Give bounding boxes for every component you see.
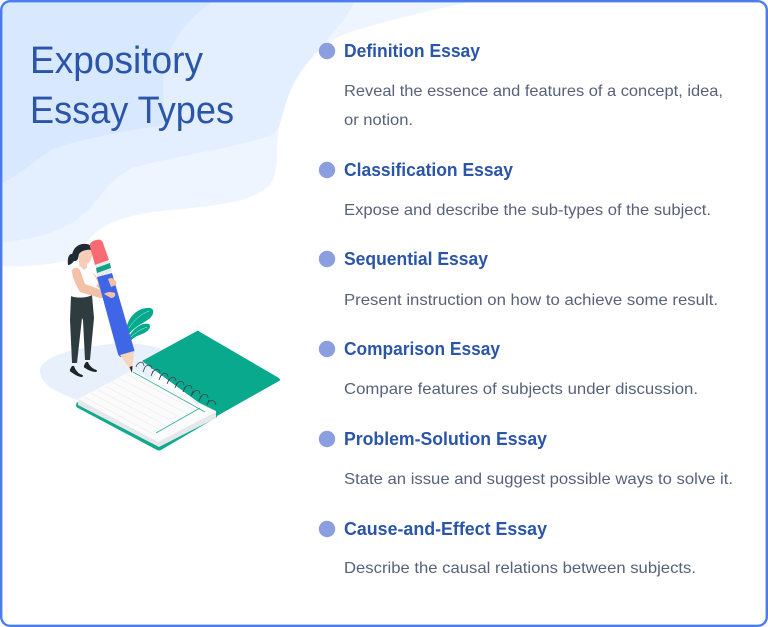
item: Comparison Essay — [319, 339, 698, 398]
icon: leaves — [126, 308, 153, 343]
item: Sequential Essay — [319, 249, 718, 309]
title: Expository — [30, 40, 203, 82]
item: Classification Essay: Expose and describe the sub-types of the subject. — [344, 202, 711, 219]
item: Cause-and-Effect Essay: Cause-and-Effect Essay — [344, 519, 547, 539]
item: Definition Essay: Reveal the essence and features of a concept, idea, — [344, 83, 723, 100]
item: Problem-Solution Essay: Problem-Solution Essay — [344, 429, 547, 449]
item: Definition Essay: or notion. — [344, 112, 413, 129]
woman — [68, 244, 116, 377]
background blobs — [0, 0, 480, 266]
near arm — [72, 268, 115, 298]
notebook — [76, 331, 280, 450]
item: Cause-and-Effect Essay: Describe the causal relations between subjects. — [344, 560, 696, 577]
far arm — [86, 268, 116, 289]
pencil — [90, 240, 134, 373]
neck and face — [78, 250, 92, 270]
title: Essay Types — [30, 90, 234, 132]
item: Cause-and-Effect Essay — [319, 519, 696, 577]
shoes — [70, 362, 97, 377]
item: Definition Essay — [319, 41, 723, 129]
item: Sequential Essay: Present instruction on how to achieve some result. — [344, 292, 718, 309]
item: Comparison Essay: Comparison Essay — [344, 339, 500, 359]
item: Definition Essay: Definition Essay — [344, 41, 480, 61]
hair — [72, 244, 92, 261]
item: Sequential Essay: Sequential Essay — [344, 249, 488, 269]
trousers — [70, 295, 94, 363]
shadow — [40, 343, 170, 420]
item: Problem-Solution Essay — [319, 429, 733, 488]
item: Classification Essay: Classification Essay — [344, 160, 513, 180]
title — [30, 40, 234, 132]
item: Comparison Essay: Compare features of subjects under discussion. — [344, 381, 698, 398]
item: Problem-Solution Essay: State an issue and suggest possible ways to solve it. — [344, 471, 733, 488]
top — [71, 267, 98, 297]
item: Classification Essay — [319, 160, 711, 219]
illustration: woman writing in notebook — [40, 240, 280, 450]
